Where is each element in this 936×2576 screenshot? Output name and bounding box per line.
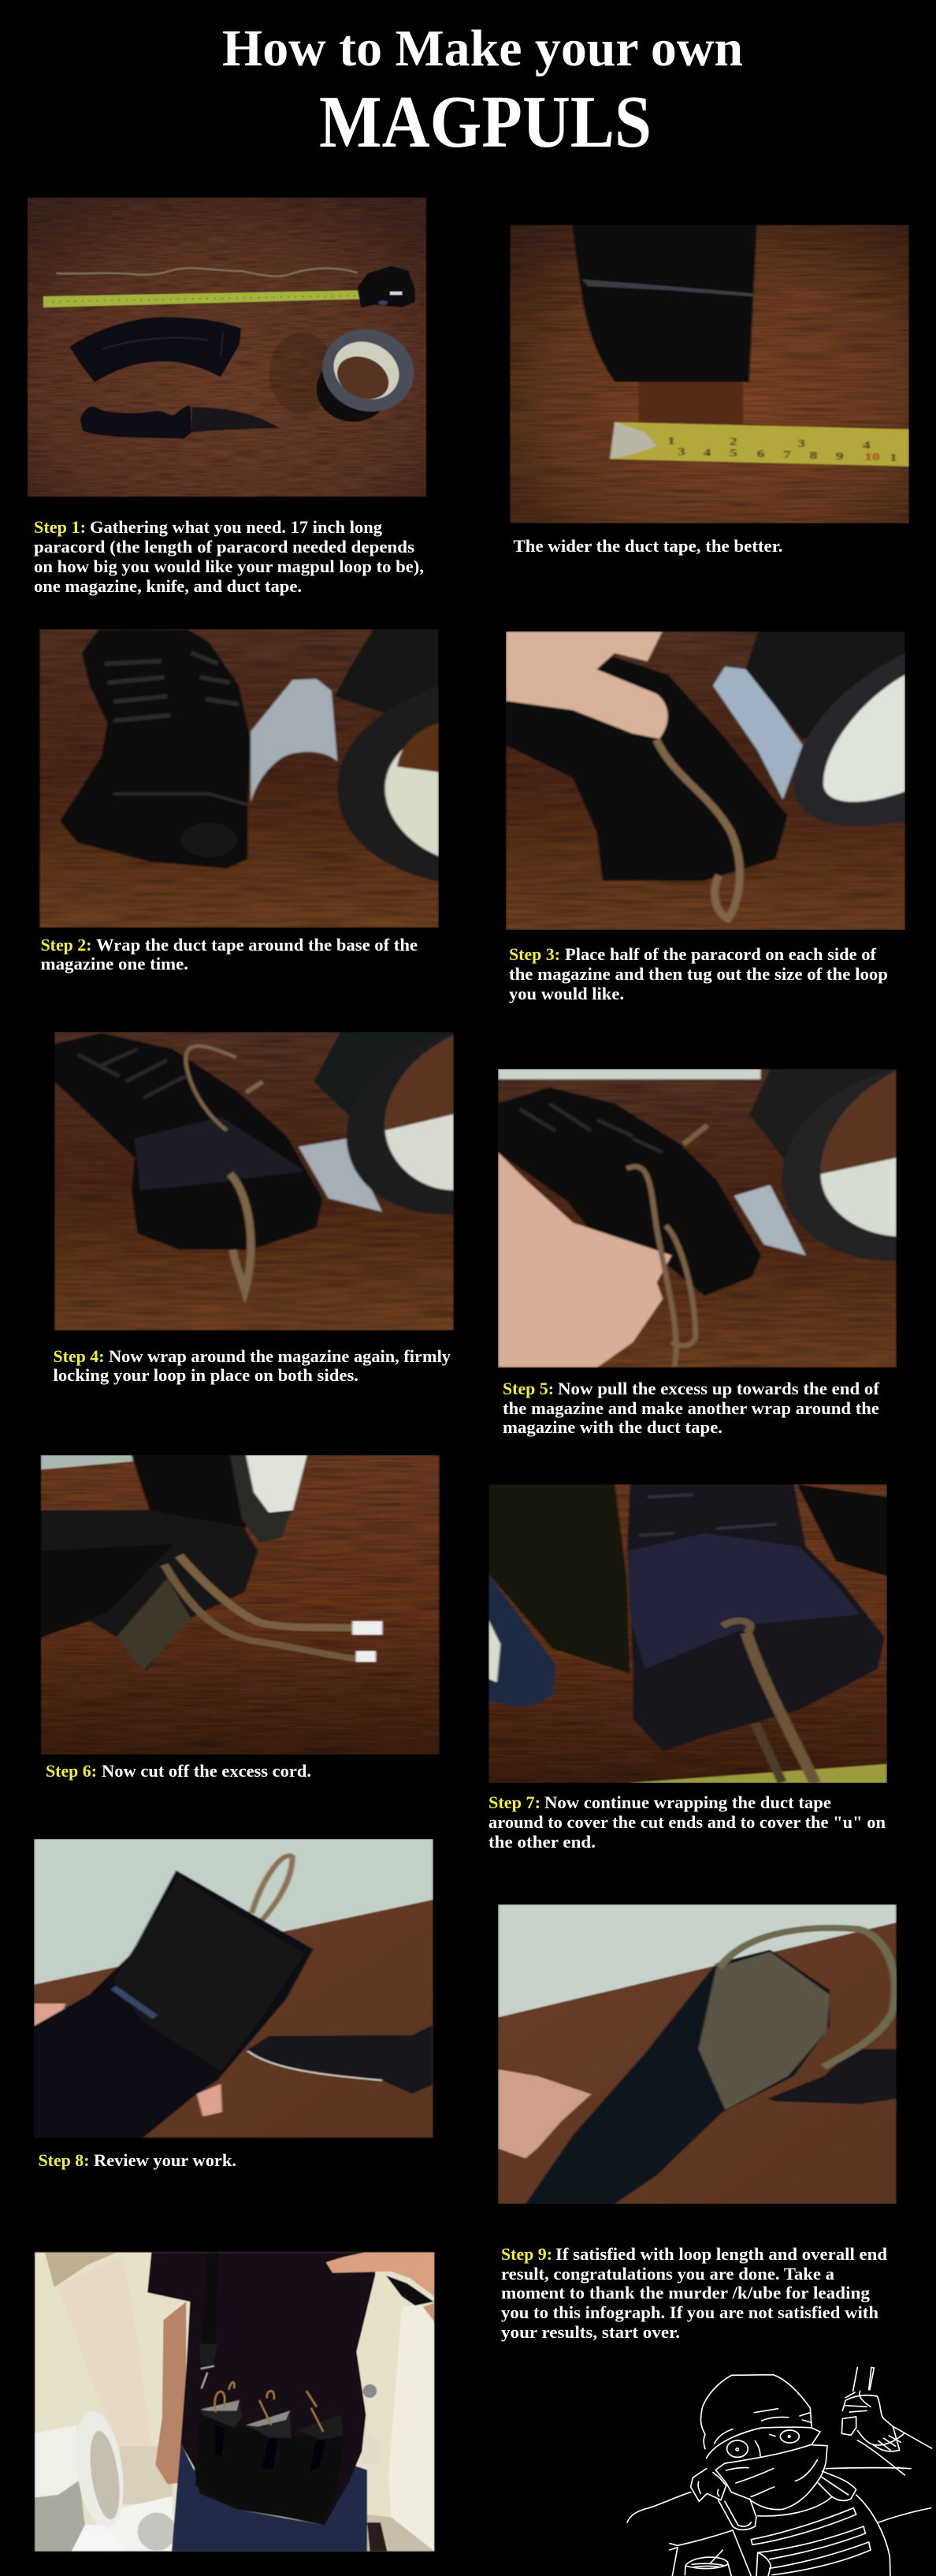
text: step 1 xyxy=(34,517,424,596)
sling tab xyxy=(719,2499,756,2529)
duct tape roll xyxy=(314,319,423,422)
text: step 9 xyxy=(501,2244,887,2342)
text: step 4 xyxy=(54,1346,451,1385)
paracord loop xyxy=(719,1928,895,2067)
wrapped magazine xyxy=(34,1871,314,2138)
tape measure xyxy=(610,422,909,467)
hand xyxy=(34,2004,222,2116)
hand xyxy=(506,631,667,739)
tape measure: 7 xyxy=(783,449,791,460)
text: step 9: moment to thank the murder /k/ube for leading xyxy=(501,2283,870,2302)
text: step 8: Review your work. xyxy=(94,2150,236,2170)
pouches xyxy=(751,2508,871,2576)
scarf knot xyxy=(691,2469,726,2501)
line drawing: masked figure xyxy=(626,2366,933,2576)
table xyxy=(498,1923,897,2204)
wrapped magazine xyxy=(526,1949,830,2204)
tape measure: 3 xyxy=(678,445,685,457)
wall strip xyxy=(41,1455,132,1469)
text: step 7: the other end. xyxy=(488,1832,596,1852)
text: step 5: Now pull the excess up towards the end of xyxy=(558,1379,880,1398)
text: step 3 xyxy=(509,944,888,1003)
bathroom background xyxy=(35,2252,434,2552)
tape strip xyxy=(251,679,337,802)
arm xyxy=(155,2302,186,2485)
toilet xyxy=(35,2408,176,2552)
wall strip xyxy=(498,1069,760,1079)
tape measure: 6 xyxy=(757,448,765,460)
text: step 6: Now cut off the excess cord. xyxy=(102,1761,311,1781)
cut paracord xyxy=(164,1555,382,1662)
wrapped magazine xyxy=(627,1484,885,1751)
tape measure: 9 xyxy=(836,450,844,462)
paracord loops xyxy=(627,1126,708,1367)
tape measure: 1 xyxy=(667,435,675,447)
tape strip xyxy=(299,1139,382,1212)
sling strap xyxy=(199,2252,218,2388)
text: step 6: Step 6: xyxy=(46,1761,97,1781)
photo: step 6 xyxy=(41,1455,440,1755)
text: step 1: Step 1: xyxy=(34,517,86,537)
text: step 1: on how big you would like your magpul loop to be), xyxy=(34,557,424,576)
text: step 3: the magazine and then tug out the size of the loop xyxy=(509,964,888,984)
text: step 2: Step 2: xyxy=(41,935,91,955)
helmet xyxy=(700,2375,812,2449)
magazine xyxy=(506,631,788,880)
text: step 3: you would like. xyxy=(509,984,624,1003)
text: step 1: Gathering what you need. 17 inch long xyxy=(90,517,382,537)
black case xyxy=(797,1484,887,1576)
pouch panel xyxy=(195,2414,344,2525)
text: step 3: Step 3: xyxy=(509,944,560,964)
text: step 2 xyxy=(41,935,418,973)
text: step 7: Step 7: xyxy=(488,1792,540,1812)
title: MAGPULS xyxy=(319,81,652,163)
text: step 5: Step 5: xyxy=(503,1379,554,1398)
tape measure: 5 xyxy=(730,447,737,459)
text: step 9: Step 9: xyxy=(501,2244,552,2264)
paracord loop xyxy=(252,1856,292,1923)
helmet details xyxy=(715,2409,812,2444)
duct tape roll xyxy=(132,1455,309,1543)
hand holding phone xyxy=(326,2252,434,2321)
knife xyxy=(80,406,280,439)
vest xyxy=(672,2495,890,2576)
text: step 5 xyxy=(503,1379,880,1437)
text: step 5: the magazine and make another wrap around the xyxy=(503,1398,879,1418)
hand xyxy=(498,2069,591,2158)
text: step 7: around to cover the cut ends and to cover the "u" on xyxy=(488,1812,886,1832)
tape measure: 4 xyxy=(704,446,711,458)
magazine xyxy=(54,1033,322,1250)
photo: step 7 xyxy=(488,1484,887,1783)
jeans xyxy=(172,2444,367,2552)
duct tape roll xyxy=(488,1484,630,1707)
mask folds xyxy=(726,2460,817,2496)
tape measure: 4 xyxy=(863,439,871,451)
magazines and loops xyxy=(201,2382,344,2440)
tape measure xyxy=(627,1764,887,1783)
hand xyxy=(498,1152,671,1368)
text: step 1: one magazine, knife, and duct tape. xyxy=(34,576,302,596)
paracord xyxy=(57,268,357,276)
photo: step 2 xyxy=(39,629,439,928)
text: step 7 xyxy=(488,1792,886,1852)
tape measure: 10 xyxy=(864,451,880,463)
photo: duct tape width xyxy=(510,225,909,523)
text: step 5: magazine with the duct tape. xyxy=(503,1417,722,1437)
text: step 4: Now wrap around the magazine again, firmly xyxy=(109,1346,451,1366)
tape measure: 8 xyxy=(809,449,817,461)
text: step 9: If satisfied with loop length and overall end xyxy=(555,2244,887,2264)
magazine and base xyxy=(41,1510,258,1671)
photo: step 4 xyxy=(54,1032,454,1331)
tape roll xyxy=(572,225,757,424)
photo: final result worn xyxy=(34,2251,435,2552)
knife xyxy=(767,2049,897,2104)
text: step 9: your results, start over. xyxy=(501,2322,680,2342)
photo: step 1 supplies xyxy=(27,197,427,497)
magazine xyxy=(69,317,241,382)
text: step 4: Step 4: xyxy=(54,1346,104,1366)
text: step 3: Place half of the paracord on each side of xyxy=(565,944,877,964)
paracord xyxy=(186,1046,262,1290)
text: step 2: magazine one time. xyxy=(41,954,188,973)
tape measure: 2 xyxy=(730,436,737,448)
shoulder lines xyxy=(627,2468,931,2550)
paracord xyxy=(722,1621,815,1783)
duct tape roll xyxy=(334,629,439,882)
photo: step 5 xyxy=(498,1069,897,1368)
knife xyxy=(246,2025,433,2094)
duct tape roll xyxy=(749,1069,897,1261)
raised hand and knife xyxy=(842,2367,932,2448)
text: step 2: Wrap the duct tape around the base of the xyxy=(96,935,418,955)
text: step 4: locking your loop in place on both sides. xyxy=(54,1365,358,1385)
paracord xyxy=(656,740,740,919)
text: step 9: you to this infograph. If you are not satisfied with xyxy=(501,2302,878,2322)
magazine xyxy=(498,1087,761,1296)
wall xyxy=(498,1904,897,2204)
table xyxy=(34,1900,433,2138)
photo: step 3 xyxy=(506,631,905,930)
title xyxy=(222,20,743,163)
text: step 8: Step 8: xyxy=(38,2150,90,2170)
shoulder strap xyxy=(818,2471,856,2500)
text: step 9: result, congratulations you are done. Take a xyxy=(501,2264,834,2284)
photo: step 8 right xyxy=(498,1904,897,2204)
black shirt xyxy=(147,2252,375,2525)
tape strip xyxy=(713,667,803,799)
tape measure: 1 xyxy=(890,452,897,463)
duct tape roll xyxy=(746,631,905,826)
photo: step 8 left xyxy=(34,1839,433,2138)
goggles band and eyes xyxy=(707,2427,827,2510)
tape measure xyxy=(43,266,415,307)
text: step 7: Now continue wrapping the duct tape xyxy=(544,1792,831,1812)
tape strip xyxy=(734,1185,806,1256)
grenade pouch xyxy=(685,2550,731,2576)
tape measure: 3 xyxy=(797,437,805,449)
text: step 1: paracord (the length of paracord needed depends xyxy=(34,537,414,557)
text: wider tape note: The wider the duct tape, the better. xyxy=(514,536,783,556)
magazine with first wrap xyxy=(60,630,251,869)
wall xyxy=(34,1839,433,2138)
title: How to Make your own xyxy=(222,20,743,77)
magazine base xyxy=(699,1952,830,2110)
duct tape roll xyxy=(314,1032,454,1215)
